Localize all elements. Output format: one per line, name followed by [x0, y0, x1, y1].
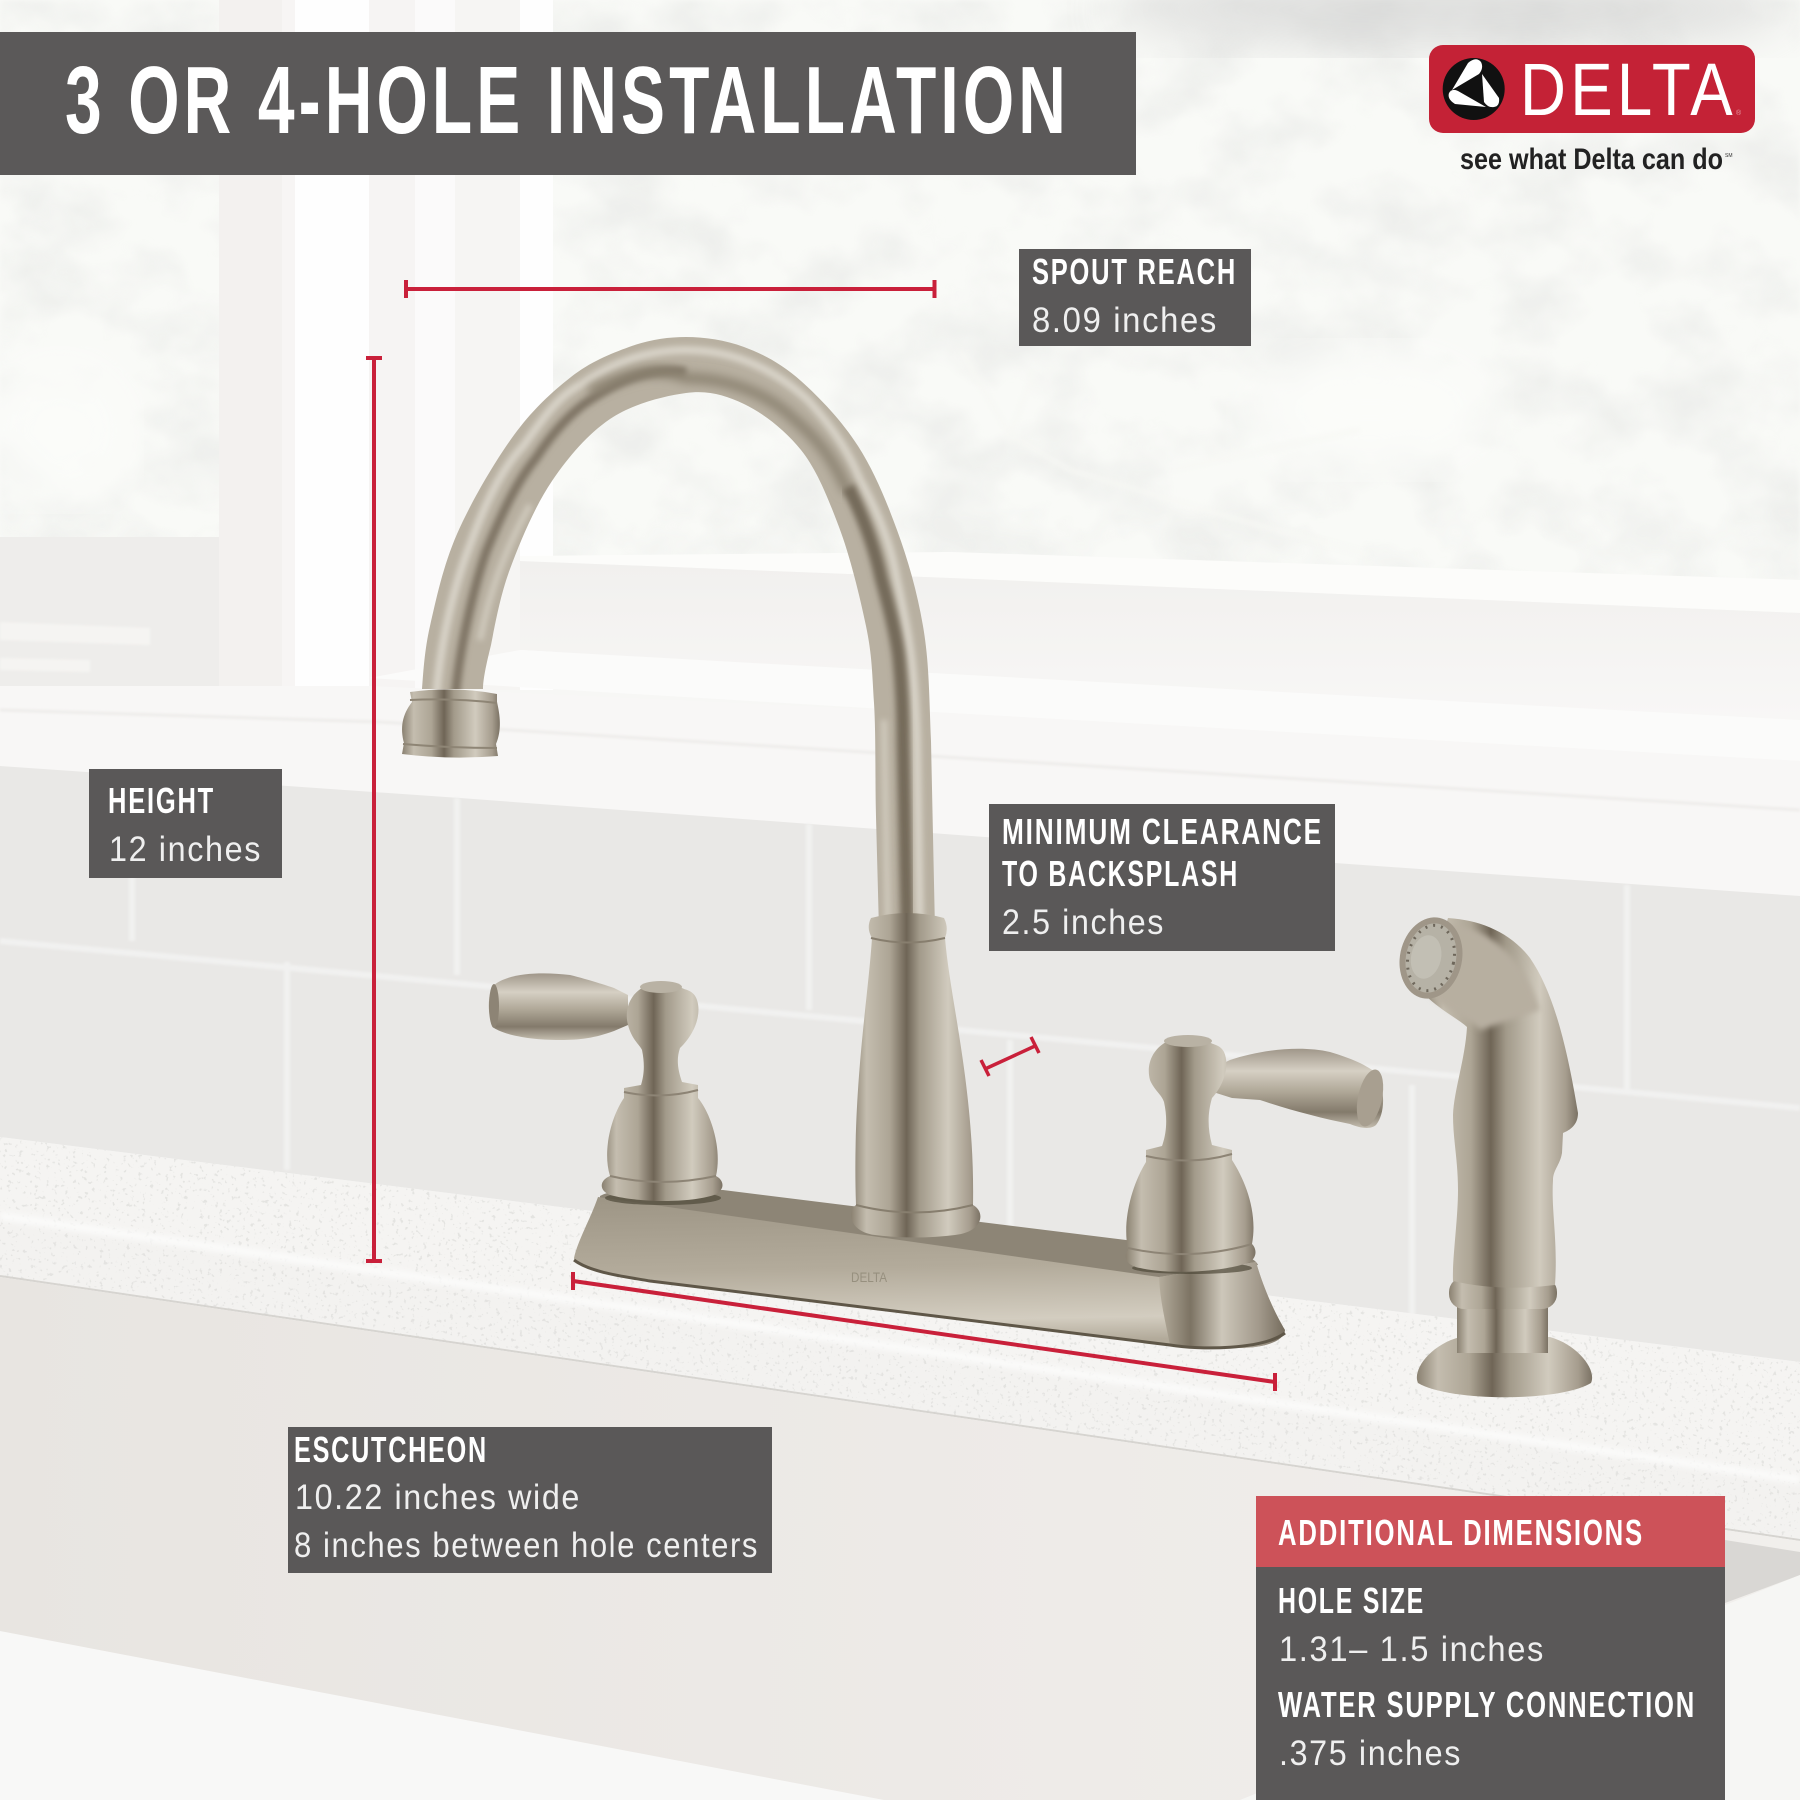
- icon: Delta triangle mark: [1443, 58, 1505, 120]
- faucet: [402, 337, 1384, 1350]
- panel: height: 12 inches: [109, 830, 262, 869]
- sprayer head highlight: [1430, 925, 1540, 1030]
- logo: Delta: see what Delta can do: [1460, 143, 1723, 176]
- panel: minimum clearance: 2.5 inches: [1002, 903, 1165, 942]
- sink: [0, 1277, 1800, 1800]
- side sprayer: [1392, 911, 1592, 1397]
- faucet spout: [422, 337, 935, 916]
- panel: additional dimensions: [1256, 1496, 1725, 1800]
- panel: escutcheon: ESCUTCHEON: [294, 1429, 488, 1470]
- logo: Delta: [1429, 45, 1755, 176]
- sprayer face: [1392, 911, 1470, 1005]
- escutcheon plate: DELTA: [851, 1269, 888, 1285]
- faucet nozzle: [402, 689, 500, 758]
- dimension line: escutcheon: [573, 1272, 1275, 1391]
- faucet riser: [851, 913, 980, 1238]
- sprayer body: [1425, 918, 1578, 1288]
- dimension line: spout reach: [406, 280, 934, 298]
- panel: additional dimensions: .375 inches: [1279, 1734, 1462, 1773]
- panel: minimum clearance: TO BACKSPLASH: [1002, 853, 1239, 894]
- dimension line: height: [366, 358, 382, 1261]
- panel: minimum clearance: [989, 804, 1335, 951]
- panel: escutcheon: [288, 1427, 772, 1573]
- dimension line: clearance: [981, 1037, 1039, 1076]
- logo: Delta: ®: [1736, 109, 1742, 117]
- counter top with speckled edge: [0, 1130, 1800, 1550]
- logo: Delta: DELTA: [1520, 48, 1737, 131]
- escutcheon plate: [574, 1190, 1285, 1348]
- panel: spout reach: SPOUT REACH: [1032, 251, 1237, 292]
- panel: spout reach: [1019, 249, 1251, 346]
- left handle: [489, 973, 722, 1205]
- title band: [0, 32, 1136, 175]
- tile backsplash: [0, 766, 1800, 1362]
- panel: spout reach: 8.09 inches: [1032, 301, 1218, 340]
- panel: additional dimensions: 1.31– 1.5 inches: [1279, 1630, 1545, 1669]
- logo: Delta: SM: [1725, 153, 1732, 159]
- panel: additional dimensions: HOLE SIZE: [1278, 1580, 1425, 1621]
- panel: additional dimensions: ADDITIONAL DIMENSIONS: [1278, 1512, 1644, 1553]
- panel: minimum clearance: MINIMUM CLEARANCE: [1002, 811, 1323, 852]
- title band: 3 OR 4-HOLE INSTALLATION: [65, 47, 1070, 154]
- panel: height: HEIGHT: [108, 780, 215, 821]
- right handle: [1126, 1035, 1388, 1274]
- panel: escutcheon: 10.22 inches wide: [295, 1478, 581, 1517]
- sprayer base: [1417, 1277, 1592, 1397]
- panel: height: [89, 769, 282, 878]
- panel: escutcheon: 8 inches between hole centers: [294, 1526, 759, 1565]
